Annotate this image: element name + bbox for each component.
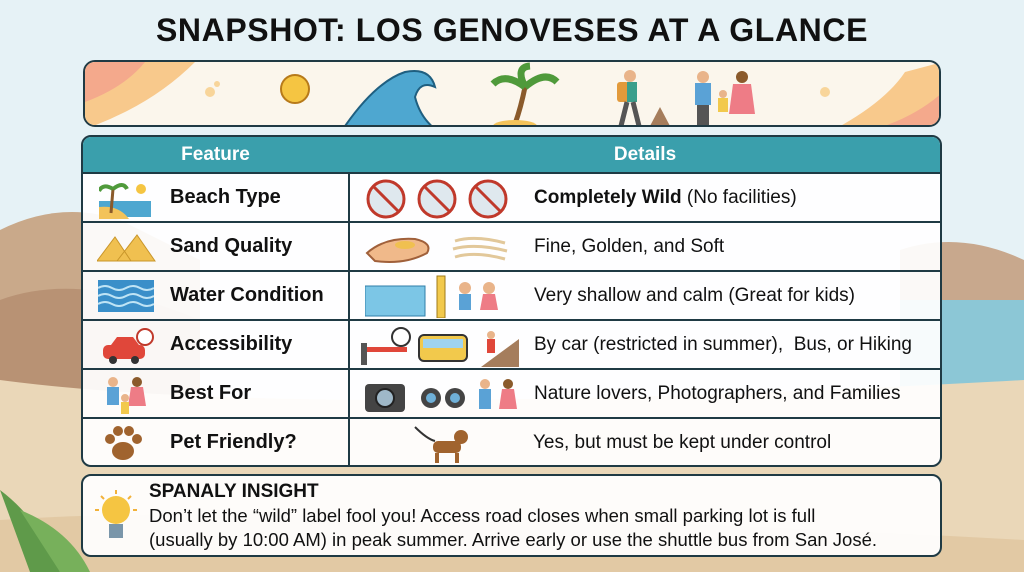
row: best for: Best For [170, 382, 251, 404]
row: sand quality: Sand Quality [170, 235, 292, 257]
row: beach type: Beach Type [170, 186, 281, 208]
insight text: (usually by 10:00 AM) in peak summer. Arrive early or use the shuttle bus from San José. [149, 529, 877, 550]
insight heading: SPANALY INSIGHT [149, 481, 319, 502]
icon: wave [343, 71, 435, 129]
row: pet friendly: Pet Friendly? [170, 431, 297, 453]
row: water condition [83, 270, 940, 319]
row: best for: Nature lovers, Photographers, and Families [534, 383, 900, 404]
row: beach type: Completely Wild (No facilities) [534, 187, 797, 208]
icon: sun [281, 75, 309, 103]
icon: hiker [617, 70, 670, 126]
icon: palm [493, 66, 557, 132]
table header: Details [614, 144, 676, 165]
row: sand quality [83, 221, 940, 270]
row: accessibility [83, 319, 940, 368]
row: sand quality: Fine, Golden, and Soft [534, 236, 724, 257]
icon: family [695, 71, 755, 125]
banner with icons [83, 60, 941, 127]
row: pet friendly [83, 417, 940, 466]
row: accessibility: By car (restricted in summer), Bus, or Hiking [534, 334, 912, 355]
table header [83, 137, 940, 173]
row: pet friendly: Yes, but must be kept under control [533, 432, 831, 453]
row: best for [83, 368, 940, 417]
row: water condition: Very shallow and calm (Great for kids) [534, 285, 855, 306]
row: accessibility: Accessibility [170, 333, 292, 355]
insight text [149, 505, 877, 550]
insight text: Don’t let the “wild” label fool you! Access road closes when small parking lot is full [149, 505, 815, 526]
insight box [81, 474, 942, 557]
row: water condition: Water Condition [170, 284, 324, 306]
title: SNAPSHOT: LOS GENOVESES AT A GLANCE [156, 12, 868, 48]
table header: Feature [181, 144, 250, 165]
row: beach type [83, 172, 940, 221]
table [81, 135, 942, 467]
icon: light bulb [95, 490, 137, 538]
